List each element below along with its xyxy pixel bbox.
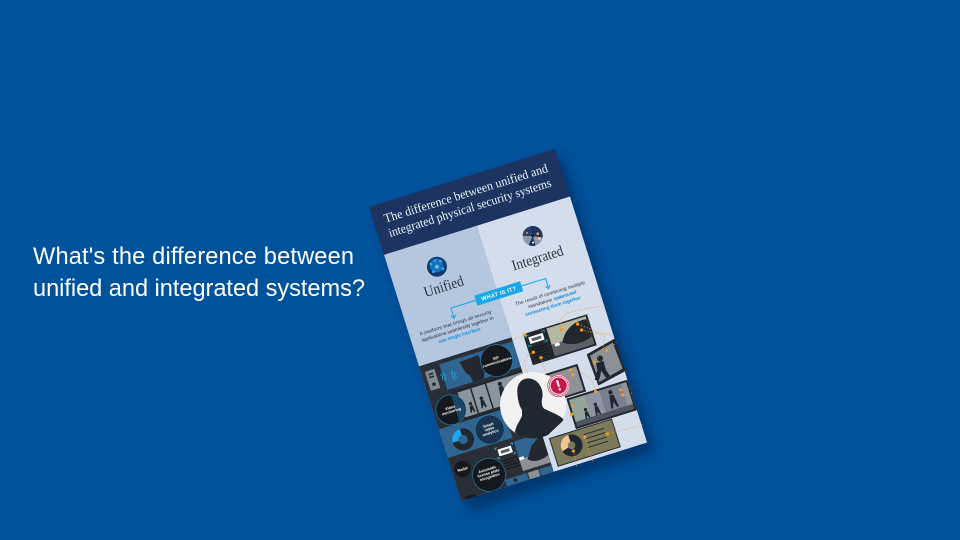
headline: What's the difference between xyxy=(33,244,354,270)
integrated description: systems and xyxy=(553,289,577,302)
silhouette: speaker xyxy=(460,355,485,382)
icon: integrated xyxy=(522,226,543,246)
callout: license plate recognition: recognition xyxy=(479,472,501,482)
integrated description: The result of combining multiple xyxy=(515,280,586,308)
row: analytics xyxy=(439,409,513,458)
dotted links xyxy=(512,305,648,468)
text lines xyxy=(503,456,520,470)
panel: unified system xyxy=(419,337,554,501)
callout: license plate recognition xyxy=(472,458,506,492)
callout: video monitoring: monitoring xyxy=(441,407,462,417)
camera view xyxy=(514,433,551,471)
callout: smart video analytics: Smart xyxy=(483,422,495,429)
slide xyxy=(33,148,658,514)
title: integrated physical security systems xyxy=(387,176,553,240)
icon: phone xyxy=(425,369,440,391)
walker camera window xyxy=(587,338,627,386)
window: alert camera xyxy=(544,364,586,398)
callout: SIP: communications xyxy=(482,356,512,369)
figures xyxy=(468,382,504,413)
bottom tiles xyxy=(505,465,554,487)
what is it label xyxy=(474,281,523,306)
callout: smart video analytics: analytics xyxy=(482,429,499,437)
dark circle fragment xyxy=(464,494,477,500)
panel: integrated systems xyxy=(523,314,637,467)
right column background xyxy=(477,196,647,472)
row: video xyxy=(436,370,523,426)
title: The difference between unified and xyxy=(382,161,550,226)
orange nodes xyxy=(523,322,624,453)
what is it connector xyxy=(449,278,551,319)
document shadow xyxy=(376,157,655,512)
callout: video monitoring: Video xyxy=(445,404,456,411)
orange connection network xyxy=(512,305,648,468)
pie chart xyxy=(560,434,582,456)
headline: unified and integrated systems? xyxy=(33,276,365,302)
integrated description: connecting them together xyxy=(525,295,582,318)
heading: integrated: Integrated xyxy=(510,243,566,274)
icon: sound waves xyxy=(440,370,458,381)
unified description: A platform that brings all security xyxy=(419,309,493,337)
window: license plate camera xyxy=(523,314,597,365)
left column background xyxy=(384,226,554,501)
callout: smart video analytics xyxy=(474,414,504,444)
callout: radar: Radar xyxy=(457,466,469,473)
window: khaki dashboard xyxy=(550,419,620,466)
unified description: one single interface xyxy=(438,326,482,345)
what is it label: WHAT IS IT? xyxy=(481,286,518,303)
window: three camera views xyxy=(566,380,637,429)
icon: unified xyxy=(427,256,447,277)
callout: license plate recognition: license plate xyxy=(477,468,500,479)
heading: unified: Unified xyxy=(422,273,466,301)
callout: smart video analytics: video xyxy=(484,426,496,433)
infographic document xyxy=(369,149,652,515)
title band xyxy=(369,149,570,255)
integrated description: standalone xyxy=(527,297,553,310)
avatar disc xyxy=(492,364,574,446)
row: license plates xyxy=(454,437,554,500)
pie chart xyxy=(452,428,474,450)
row: intercom xyxy=(424,341,521,391)
person silhouette xyxy=(515,378,564,439)
callout: SIP: SIP xyxy=(492,356,500,361)
plate icon xyxy=(495,443,515,459)
alert icon xyxy=(544,371,573,400)
unified description: applications seamlessly together in xyxy=(421,315,495,344)
callout: license plate recognition: Automatic xyxy=(478,465,497,474)
headline xyxy=(33,244,365,302)
callout: video monitoring xyxy=(436,394,466,426)
callout: SIP xyxy=(480,344,513,378)
